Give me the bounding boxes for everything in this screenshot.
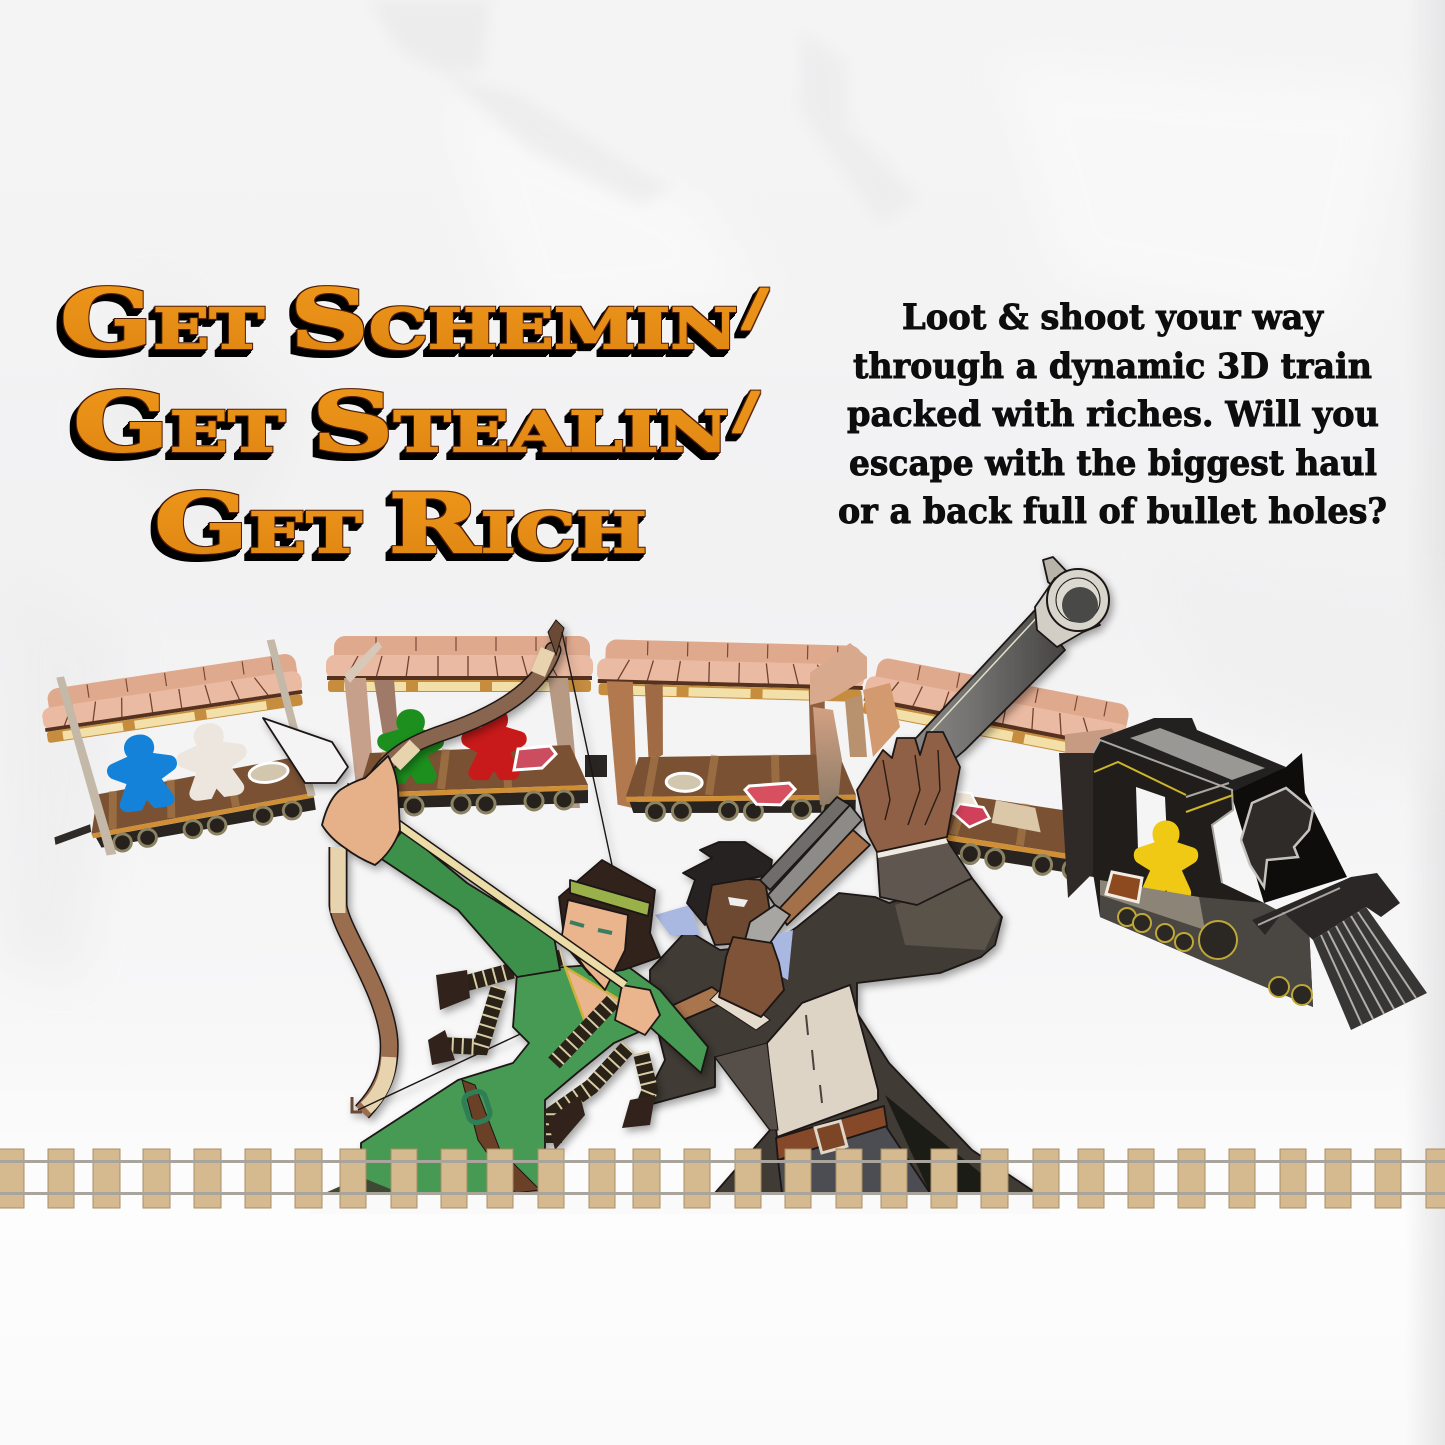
boiler — [1241, 788, 1313, 887]
hair back — [559, 860, 660, 975]
bow tip — [548, 620, 564, 655]
title line 2 apostrophe: ' — [678, 360, 780, 537]
rifle muzzle — [1035, 557, 1109, 647]
title: three stacked lines — [60, 257, 789, 572]
eye — [728, 897, 748, 907]
left coat flap — [715, 1043, 778, 1130]
title line 1: G ET S CHEMIN — [60, 273, 738, 368]
cardboard edge highlights — [1093, 740, 1233, 883]
coupling between cars — [585, 755, 607, 777]
bandana — [655, 905, 700, 935]
bow lower limb — [338, 847, 389, 1112]
eyes — [570, 922, 612, 933]
meeple: white — [174, 720, 250, 801]
loot token: gem card — [745, 782, 795, 805]
face — [562, 900, 628, 990]
rifle lower tubes — [760, 797, 850, 890]
coat interior — [885, 1095, 1005, 1193]
rifle barrel — [880, 610, 1065, 805]
meeple: green — [379, 711, 442, 782]
belt strap — [462, 1080, 540, 1193]
sleeve cuff — [877, 840, 972, 905]
hair — [683, 842, 772, 925]
man with rifle — [641, 557, 1109, 1193]
dark leg — [325, 1177, 400, 1193]
cab window — [1136, 787, 1168, 860]
rifle stock — [775, 830, 870, 925]
car 3 right end posts — [810, 643, 867, 805]
shirt — [767, 985, 878, 1137]
rails — [0, 1160, 1445, 1163]
train car 4 (rear of locomotive) — [835, 655, 1133, 892]
bow wraps — [338, 650, 548, 1108]
collar — [701, 930, 793, 980]
locomotive body — [1093, 740, 1313, 1007]
title line 2: G ET S TEALIN — [73, 376, 729, 471]
white shirt cuff — [877, 836, 948, 858]
roof end plate — [1059, 720, 1124, 776]
headband — [570, 880, 650, 916]
arrow head — [263, 718, 348, 783]
drawing hand — [615, 985, 660, 1035]
roof tie left — [344, 641, 382, 683]
front hood — [1252, 873, 1400, 940]
meeple: yellow — [1135, 822, 1197, 899]
coat — [641, 878, 1036, 1193]
arrow shaft — [345, 787, 625, 985]
green sleeve — [380, 830, 560, 977]
bow string — [358, 632, 625, 1110]
train car 3 — [593, 639, 865, 826]
woman archer — [263, 620, 708, 1193]
knuckle lines — [883, 750, 940, 825]
train car 2 — [326, 636, 593, 816]
belt buckle — [815, 1121, 847, 1153]
yellow trim — [1094, 762, 1233, 812]
shirt buttons — [806, 1015, 822, 1103]
wheels — [1118, 908, 1312, 1005]
rear braids — [440, 957, 650, 1143]
mask below the figures — [310, 1194, 1050, 1214]
loot token: coin — [666, 773, 702, 792]
meeple: red — [463, 709, 525, 778]
car 4 left end panel — [863, 683, 900, 757]
title line 1 apostrophe: ' — [687, 257, 789, 434]
sleeve highlight — [895, 880, 1000, 950]
sash braid — [554, 1000, 614, 1063]
meeple: blue — [105, 732, 181, 812]
loot token: coin — [248, 760, 289, 785]
forearm cuff — [710, 985, 770, 1030]
loot token — [1106, 872, 1142, 902]
cow catcher — [1313, 907, 1427, 1030]
description text block: packed with riches. Will you — [847, 394, 1379, 435]
title line 3: G ET R ICH — [154, 477, 647, 572]
description text block: escape with the biggest haul — [849, 443, 1377, 484]
green dress — [361, 963, 708, 1193]
bow upper limb — [370, 650, 553, 790]
lower hand on grip — [719, 937, 784, 1017]
loot token: gem — [514, 746, 556, 770]
rear wall — [1059, 753, 1093, 898]
bow hook — [352, 1097, 362, 1112]
upper hand on barrel — [857, 732, 960, 852]
dark interior behind boiler — [1230, 753, 1347, 903]
braid tassels — [428, 970, 655, 1150]
sleepers — [0, 1149, 1445, 1208]
description text block: or a back full of bullet holes? — [838, 491, 1387, 532]
loot tokens — [933, 787, 1045, 841]
bow hand — [322, 756, 400, 865]
cab roof — [1100, 718, 1286, 792]
locomotive — [1059, 718, 1427, 1030]
head — [701, 877, 772, 945]
belt ring — [462, 1089, 492, 1125]
receiver — [745, 905, 790, 950]
railroad track — [0, 1149, 1445, 1208]
train car 1 — [30, 636, 323, 863]
trousers — [778, 1125, 930, 1193]
description text block — [838, 297, 1387, 532]
running board — [1100, 893, 1313, 1007]
neckline — [565, 967, 620, 1030]
description text block: Loot & shoot your way — [902, 297, 1325, 338]
belt — [776, 1106, 887, 1160]
description text block: through a dynamic 3D train — [853, 346, 1372, 387]
